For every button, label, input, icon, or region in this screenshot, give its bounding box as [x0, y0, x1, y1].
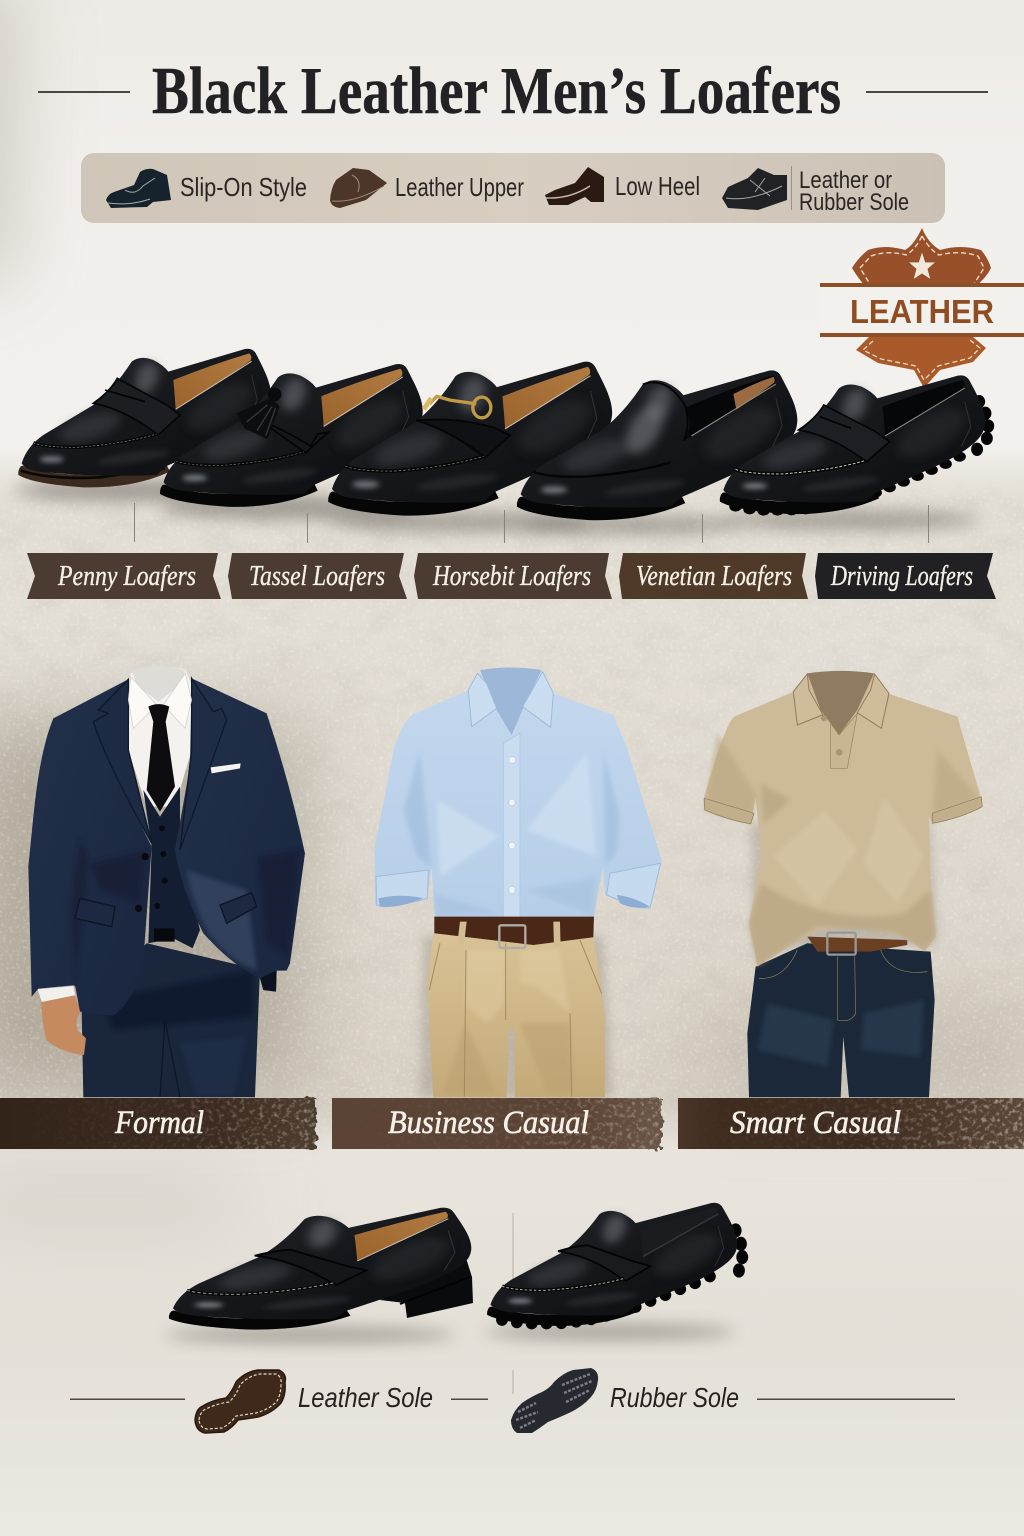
shoe row shadows: [15, 479, 980, 534]
ribbon: penny loafers: [27, 553, 221, 599]
label: leather sole: Leather Sole: [298, 1382, 433, 1413]
rubber sole row: [511, 1368, 955, 1433]
outfit: formal suit: [28, 667, 305, 1097]
leather sole row: [70, 1370, 488, 1433]
title: Black Leather Men’s Loafers: [152, 54, 841, 128]
buttons: [135, 825, 168, 912]
ribbon: tassel loafers: Tassel Loafers: [249, 561, 385, 592]
shadow: [420, 937, 613, 1097]
ribbon: penny loafers: Penny Loafers: [57, 561, 196, 592]
shoe: tassel loafer: [160, 364, 423, 507]
shirt body: [374, 672, 662, 918]
shoe: horsebit loafer: [328, 362, 612, 516]
trousers: [82, 943, 260, 1097]
leather badge: LEATHER: [850, 293, 994, 330]
jacket right: [175, 678, 305, 992]
collar: [468, 672, 553, 727]
icon: low heel: [545, 167, 604, 205]
band: business casual: [332, 1098, 662, 1149]
shoe: leather sole example: [169, 1208, 473, 1330]
gold horsebit: [424, 396, 491, 418]
placket: [831, 713, 857, 768]
shoe: penny loafer: [18, 349, 271, 487]
ribbon: horsebit loafers: [414, 553, 612, 599]
lapels: [93, 679, 152, 843]
jacket left: [28, 679, 152, 1016]
belt: [807, 937, 907, 952]
label: slip-on style: Slip-On Style: [180, 172, 307, 202]
feature strip: [81, 153, 945, 223]
flap pockets: [75, 893, 257, 927]
rubber studs: [729, 395, 994, 516]
khaki trousers: [427, 933, 605, 1097]
label: leather upper: Leather Upper: [395, 172, 524, 202]
tie: [147, 704, 175, 812]
ribbon: venetian loafers: [619, 553, 808, 599]
ribbon: tassel loafers: [228, 553, 407, 599]
leather badge: [820, 228, 1024, 388]
cuffs: [38, 950, 277, 1002]
shoe: driving loafer: [720, 375, 994, 516]
polo body: [703, 673, 982, 967]
buttons: [509, 757, 516, 893]
outfit: business casual: [374, 667, 662, 1097]
band: formal: Formal: [114, 1105, 204, 1141]
outfit: smart casual: [703, 671, 982, 1097]
icon: leather sole: [195, 1370, 285, 1433]
shoe shadows bottom: [165, 1324, 735, 1343]
divider: vertical: [512, 1213, 514, 1394]
icon: sole shoe: [722, 168, 787, 210]
icon: rubber sole: [511, 1368, 598, 1433]
band: smart casual: [678, 1098, 1024, 1149]
ribbon: horsebit loafers: Horsebit Loafers: [432, 561, 591, 592]
label: leather or rubber sole: Leather or: [799, 167, 892, 194]
ribbon: driving loafers: Driving Loafers: [830, 561, 973, 592]
label: low heel: Low Heel: [615, 171, 700, 201]
inner neck: [807, 671, 874, 735]
waistcoat: [143, 787, 200, 948]
shoe: rubber sole example: [487, 1203, 748, 1329]
jeans: [747, 943, 935, 1097]
shoe: venetian loafer: [517, 370, 797, 520]
belt: [434, 917, 594, 945]
label: leather or rubber sole: Rubber Sole: [799, 189, 909, 216]
skin hand: [41, 993, 86, 1055]
tassel: [236, 388, 281, 439]
collar: [128, 673, 192, 728]
shirt: [128, 667, 192, 807]
label: leather or rubber sole: [791, 166, 909, 216]
band: business casual: Business Casual: [388, 1105, 589, 1141]
placket: [503, 733, 520, 920]
band: smart casual: Smart Casual: [730, 1105, 901, 1141]
icon: leather upper: [330, 168, 387, 208]
band: formal: [0, 1098, 316, 1149]
ribbon: driving loafers: [815, 553, 996, 599]
inner neck: [480, 667, 542, 735]
connector lines: [134, 503, 929, 543]
ribbon: venetian loafers: Venetian Loafers: [636, 561, 792, 592]
shadow: [751, 823, 937, 950]
collar: [793, 674, 889, 728]
label: rubber sole: Rubber Sole: [610, 1382, 739, 1413]
pocket square: [211, 763, 241, 773]
icon: slip-on shoe: [106, 169, 171, 208]
